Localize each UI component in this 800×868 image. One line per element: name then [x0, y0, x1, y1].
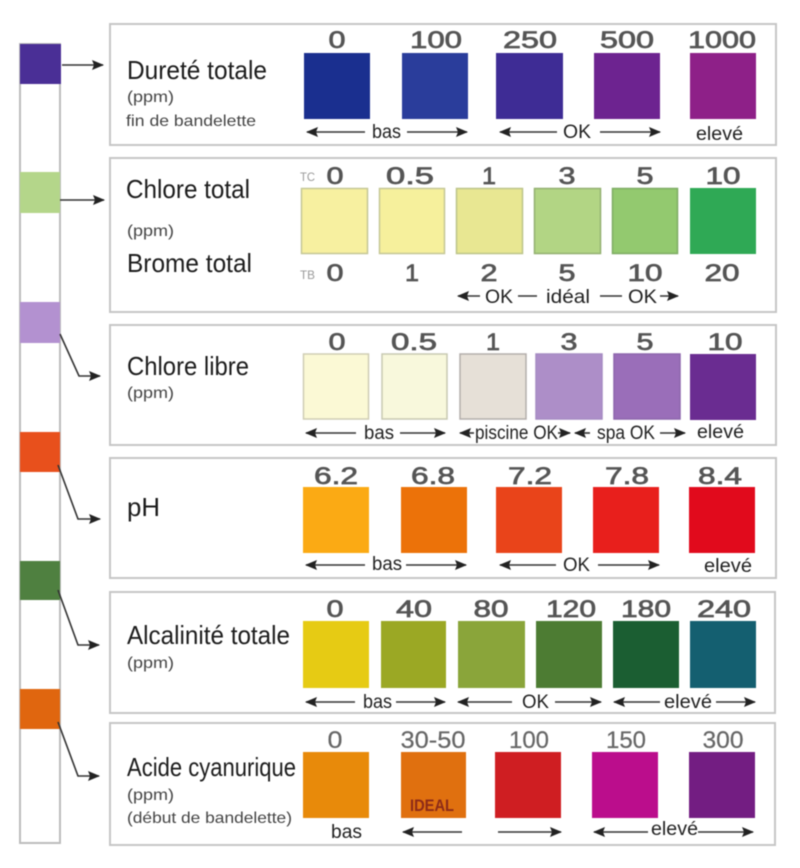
note text: fin de bandelette: [126, 113, 256, 130]
TB scale values: 10: [628, 260, 662, 287]
scale values: 0: [328, 727, 342, 754]
colour swatches: [304, 53, 756, 119]
scale values: [328, 27, 756, 54]
scale values: 0: [328, 27, 346, 54]
range indicators: elevé: [697, 422, 744, 443]
scale values: 100: [509, 727, 549, 754]
arrow: strip to pH: [58, 465, 100, 519]
scale values: 0.5: [391, 329, 437, 356]
scale values: 250: [503, 27, 557, 54]
unit text: (ppm): [127, 89, 174, 106]
heading: dureté totale: Dureté totale: [127, 55, 267, 85]
scale values: 7.2: [508, 463, 552, 490]
scale values: 300: [702, 727, 744, 754]
TC scale values: 5: [636, 163, 654, 190]
scale values: 7.8: [605, 463, 649, 490]
scale values: [326, 596, 751, 623]
TC scale values: 1: [482, 163, 496, 190]
range indicators: OK: [485, 287, 513, 308]
colour swatches: [303, 621, 756, 688]
range indicators: spa OK: [597, 423, 655, 444]
scale values: 5: [636, 329, 654, 356]
scale values: 1: [486, 329, 500, 356]
scale values: [328, 727, 744, 754]
scale values: 8.4: [698, 463, 742, 490]
arrow: strip to alkalinity: [58, 590, 99, 645]
TB scale values: 1: [405, 260, 419, 287]
panel: acide cyanurique: [110, 723, 775, 845]
range indicators: elevé: [664, 692, 712, 713]
range indicators: bas: [372, 554, 402, 575]
range indicators: bas: [363, 692, 392, 713]
heading: brome total: Brome total: [127, 248, 252, 278]
range indicators: [307, 122, 743, 145]
TC scale values: [300, 163, 740, 190]
TB scale values: 5: [558, 260, 576, 287]
unit text: (ppm): [127, 385, 174, 402]
scale values: 6.8: [411, 463, 455, 490]
colour swatches: [304, 354, 756, 420]
range indicators: [306, 554, 752, 577]
range indicators: bas: [331, 822, 362, 843]
TC scale values: 0.5: [386, 163, 434, 190]
scale values: 0: [326, 596, 344, 623]
scale values: 100: [410, 27, 462, 54]
scale values: 80: [474, 596, 508, 623]
scale values: 0: [328, 329, 346, 356]
range indicators: bas: [372, 122, 401, 143]
arrow: strip to total chlorine: [60, 199, 104, 201]
range indicators: elevé: [651, 819, 698, 840]
panel: alcalinité totale: [110, 592, 775, 713]
unit text: (ppm): [127, 787, 174, 804]
colour swatches: [303, 752, 755, 818]
range indicators: piscine OK: [475, 423, 558, 444]
heading: chlore libre: Chlore libre: [127, 351, 249, 381]
scale values: [328, 329, 742, 356]
TB scale values: 20: [704, 260, 740, 287]
arrow: strip to free chlorine: [60, 334, 100, 376]
range indicators: elevé: [696, 124, 743, 145]
range indicators: bas: [364, 423, 394, 444]
heading: pH: pH: [127, 492, 160, 522]
TC scale values: TC: [300, 170, 315, 184]
range indicators: OK: [563, 122, 591, 143]
range indicators: [306, 692, 755, 713]
note text: (début de bandelette): [127, 810, 292, 827]
scale values: 6.2: [314, 463, 358, 490]
range indicators: [306, 422, 744, 444]
panel: chlore total / brome total: [110, 158, 776, 312]
arrow: strip to cyanuric acid: [58, 722, 99, 776]
heading: alcalinité totale: Alcalinité totale: [127, 620, 290, 650]
range indicators: OK: [522, 692, 549, 713]
scale values: 120: [546, 596, 596, 623]
scale values: 30-50: [400, 727, 466, 754]
TB scale values: 0: [326, 260, 344, 287]
range indicators: idéal: [546, 287, 590, 308]
TC scale values: 0: [326, 163, 344, 190]
TC scale values: 3: [558, 163, 576, 190]
heading: acide cyanurique: Acide cyanurique: [127, 752, 296, 782]
scale values: 500: [600, 27, 654, 54]
range indicators: OK: [563, 555, 590, 576]
scale values: 150: [606, 727, 646, 754]
scale values: 240: [697, 596, 751, 623]
scale values: [314, 463, 742, 490]
TB scale values: TB: [300, 268, 315, 282]
TB scale values: 2: [480, 260, 498, 287]
range indicators: [331, 819, 753, 843]
arrow: strip to total hardness: [62, 64, 103, 66]
TC scale values: 10: [706, 163, 740, 190]
range indicators: OK: [628, 287, 657, 308]
scale values: 1000: [688, 27, 756, 54]
scale values: 10: [708, 329, 742, 356]
range indicators: [458, 287, 678, 308]
unit text: (ppm): [127, 223, 174, 240]
panel: pH: [110, 458, 776, 578]
swatch label: ideal: IDEAL: [410, 796, 454, 815]
colour swatches: [302, 188, 756, 254]
range indicators: elevé: [704, 556, 752, 577]
panel: dureté totale: [110, 24, 776, 145]
unit text: (ppm): [127, 655, 174, 672]
TB scale values: [300, 260, 740, 287]
panel: chlore libre: [110, 325, 776, 445]
test strip: [20, 44, 61, 843]
colour swatches: [303, 487, 755, 553]
heading: chlore total: Chlore total: [126, 174, 250, 204]
scale values: 40: [396, 596, 432, 623]
scale values: 180: [621, 596, 671, 623]
scale values: 3: [560, 329, 578, 356]
